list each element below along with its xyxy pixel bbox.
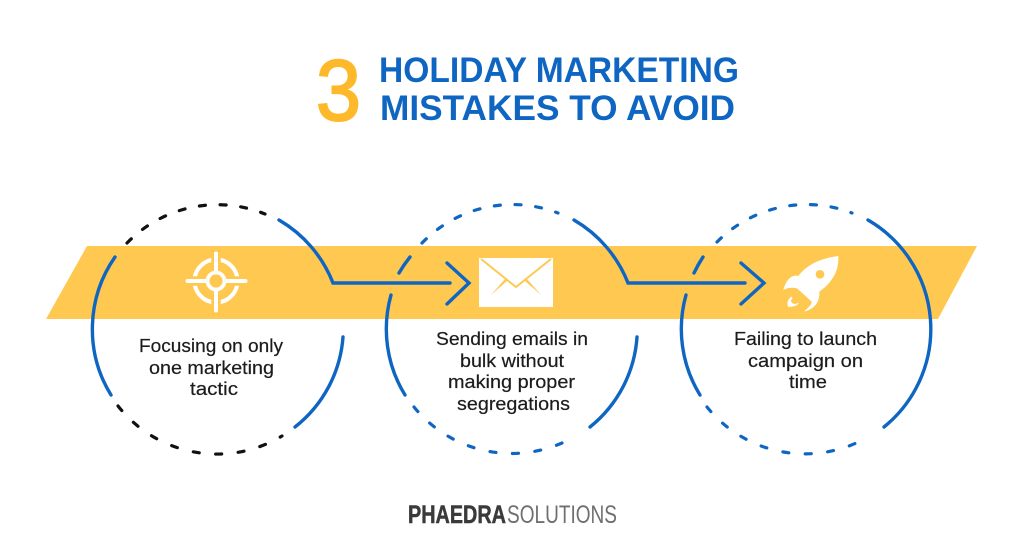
numeral 3: 3 xyxy=(316,43,361,139)
heading text: MISTAKES TO AVOID xyxy=(380,89,735,128)
title xyxy=(316,43,739,139)
logo: Phaedra Solutions xyxy=(408,501,617,529)
text: step 3: campaign on xyxy=(748,351,863,371)
icon: rocket xyxy=(783,256,838,312)
text: step 1: tactic xyxy=(190,379,238,399)
panel: step 2 sending emails in bulk xyxy=(386,205,637,453)
text: step 2 xyxy=(436,329,588,414)
text: step 2: making proper xyxy=(448,372,575,392)
text: step 3: time xyxy=(789,372,827,392)
logo: Phaedra Solutions: PHAEDRA xyxy=(408,501,506,529)
heading text: HOLIDAY MARKETING xyxy=(379,51,739,90)
yellow ribbon band xyxy=(46,246,977,319)
text: step 3 xyxy=(734,329,877,392)
circle 3 outline xyxy=(681,205,931,454)
text: step 2: segregations xyxy=(457,394,570,414)
icon: envelope xyxy=(479,258,553,307)
text: step 1: one marketing xyxy=(149,358,274,378)
circle 2 outline xyxy=(386,205,637,453)
text: step 1: Focusing on only xyxy=(139,336,283,356)
circle 1 outline xyxy=(92,205,343,454)
text: step 2: bulk without xyxy=(460,351,564,371)
icon: target xyxy=(188,254,246,310)
text: step 3: Failing to launch xyxy=(734,329,877,349)
panel: step 3 launching on time xyxy=(681,205,931,454)
logo: Phaedra Solutions: SOLUTIONS xyxy=(507,501,617,529)
text: step 2: Sending emails in xyxy=(436,329,588,349)
heading text xyxy=(379,51,739,128)
arrow: step 2 to step 3 xyxy=(574,220,764,304)
text: step 1 xyxy=(139,336,283,399)
arrow: step 1 to step 2 xyxy=(279,220,469,304)
panel: step 1 focusing on one tactic xyxy=(92,205,343,454)
